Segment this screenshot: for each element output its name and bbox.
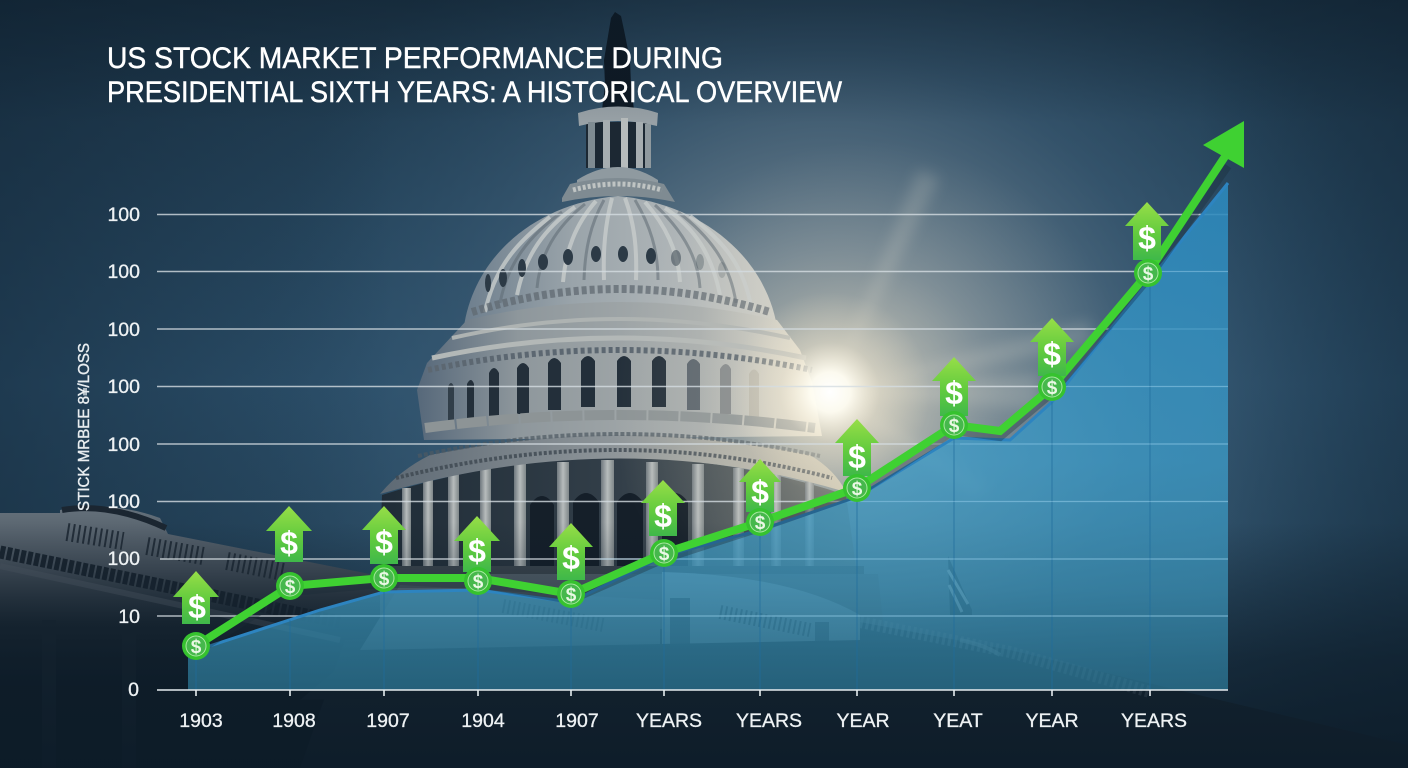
coin 7: $ xyxy=(755,513,766,534)
coin 8 xyxy=(843,474,871,502)
chart title: US STOCK MARKET PERFORMANCE DURING xyxy=(107,42,723,75)
coin 1: $ xyxy=(191,637,202,658)
marker arrow 1 xyxy=(173,571,219,625)
coin 4: $ xyxy=(473,572,484,593)
marker arrow 6 xyxy=(641,480,685,536)
coin 7 xyxy=(746,508,774,536)
marker arrow 4 xyxy=(454,516,500,572)
coin 6: $ xyxy=(659,544,670,565)
marker arrow 3: $ xyxy=(375,524,393,560)
lower building right xyxy=(300,556,1408,768)
coin 4 xyxy=(464,567,492,595)
marker arrow 10: $ xyxy=(1043,336,1061,372)
coin 10 xyxy=(1038,373,1066,401)
coin 2: $ xyxy=(285,577,296,598)
up arrow markers xyxy=(173,202,1169,625)
y axis labels: 100 xyxy=(107,376,140,398)
marker arrow 8: $ xyxy=(848,439,866,475)
y axis labels: 100 xyxy=(107,261,140,283)
green trend line with arrow xyxy=(196,121,1244,652)
chart title xyxy=(107,42,843,109)
coin 5 xyxy=(557,580,585,608)
x axis labels: 1903 xyxy=(179,710,223,732)
y axis labels: 100 xyxy=(107,548,140,570)
marker arrow 11: $ xyxy=(1138,220,1156,256)
marker arrow 1: $ xyxy=(188,589,206,625)
x axis labels: YEAR xyxy=(836,710,890,732)
dome xyxy=(463,196,778,334)
x axis labels: YEARS xyxy=(1121,710,1187,732)
coin 8: $ xyxy=(852,479,863,500)
marker arrow 7: $ xyxy=(751,474,769,510)
x axis xyxy=(157,690,1228,696)
y axis labels: 100 xyxy=(107,204,140,226)
coin 3 xyxy=(370,564,398,592)
coin 11 xyxy=(1134,259,1162,287)
y axis labels: 100 xyxy=(107,434,140,456)
marker arrow 5 xyxy=(549,523,593,580)
y axis labels xyxy=(107,204,140,701)
marker arrow 7 xyxy=(739,459,781,512)
coin 5: $ xyxy=(566,585,577,606)
marker arrow 9 xyxy=(932,357,976,416)
x axis labels: 1907 xyxy=(366,710,410,732)
coin 1 xyxy=(182,632,210,660)
marker arrow 3 xyxy=(362,506,406,564)
x axis labels: YEAT xyxy=(933,710,983,732)
coin 6 xyxy=(650,539,678,567)
y axis labels: 100 xyxy=(107,319,140,341)
y axis labels: 100 xyxy=(107,491,140,513)
y axis labels: 10 xyxy=(118,606,140,628)
y axis labels: 0 xyxy=(128,679,139,701)
coin 9: $ xyxy=(949,416,960,437)
marker arrow 11 xyxy=(1125,202,1169,260)
coin 11: $ xyxy=(1143,264,1154,285)
sun glare xyxy=(610,140,1130,660)
marker arrow 8 xyxy=(835,419,879,476)
x axis labels xyxy=(179,710,1187,732)
colonnade xyxy=(345,434,885,640)
marker arrow 6: $ xyxy=(654,498,672,534)
coin 3: $ xyxy=(379,569,390,590)
marker arrow 9: $ xyxy=(945,375,963,411)
coin 10: $ xyxy=(1047,378,1058,399)
blue area series xyxy=(188,183,1228,690)
coin nodes xyxy=(182,259,1162,660)
marker arrow 4: $ xyxy=(468,533,486,569)
x axis labels: YEARS xyxy=(736,710,802,732)
marker arrow 2 xyxy=(266,506,312,562)
marker arrow 2: $ xyxy=(280,525,298,561)
y axis title: STICK MRBEE 8¥/LOSS xyxy=(76,343,93,511)
marker arrow 5: $ xyxy=(562,540,580,576)
coin 9 xyxy=(940,411,968,439)
drum xyxy=(417,302,822,440)
x axis labels: YEARS xyxy=(636,710,702,732)
statue and lantern xyxy=(562,12,675,202)
chart title: PRESIDENTIAL SIXTH YEARS: A HISTORICAL OVERVIEW xyxy=(107,76,843,109)
x axis labels: 1907 xyxy=(555,710,599,732)
coin 2 xyxy=(276,572,304,600)
left wing xyxy=(0,506,380,768)
gridlines xyxy=(157,214,1228,616)
x axis labels: YEAR xyxy=(1025,710,1079,732)
marker arrow 10 xyxy=(1030,318,1074,376)
x axis labels: 1908 xyxy=(272,710,316,732)
x axis labels: 1904 xyxy=(461,710,505,732)
